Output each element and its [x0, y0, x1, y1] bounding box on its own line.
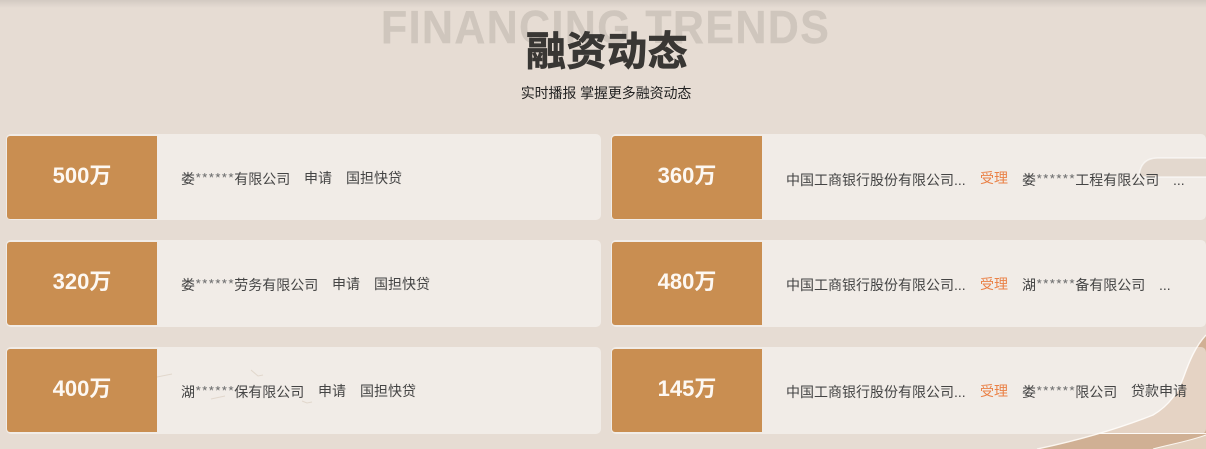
amount: 145万 — [658, 376, 716, 401]
panel: record 480万 — [611, 240, 1206, 327]
panel: record 145万: 娄******限公司 — [1022, 382, 1117, 402]
record text: 中国工商银行股份有限公司... — [786, 277, 966, 293]
title: 融资动态 — [526, 30, 688, 74]
panel: record 500万: 国担快贷 — [346, 170, 402, 186]
record text: 湖******保有限公司 — [181, 382, 304, 402]
panel: record 145万: 受理 — [980, 383, 1008, 399]
panel: record 400万 — [6, 347, 601, 434]
record text: 娄******劳务有限公司 — [181, 275, 318, 295]
panel: record 320万: 国担快贷 — [374, 276, 430, 292]
panel: record 145万: 贷款申请 — [1131, 383, 1187, 399]
amount — [612, 242, 762, 325]
amount: 480万 — [658, 269, 716, 294]
amount — [7, 136, 157, 219]
amount — [612, 136, 762, 219]
record text: 娄******有限公司 — [181, 169, 290, 189]
panel: record 500万 — [6, 134, 601, 220]
panel: record 360万: 娄******工程有限公司 — [1022, 170, 1159, 190]
panel: record 360万: 受理 — [980, 170, 1008, 186]
amount: 500万 — [53, 163, 111, 188]
background english title: FINANCING TRENDS — [381, 1, 830, 53]
panel: record 480万: 湖******备有限公司 — [1022, 275, 1145, 295]
record text: 中国工商银行股份有限公司... — [786, 172, 966, 188]
amount: 360万 — [658, 163, 716, 188]
record text: 中国工商银行股份有限公司... — [786, 384, 966, 400]
subtitle: 实时播报 掌握更多融资动态 — [521, 85, 691, 101]
amount: 320万 — [53, 269, 111, 294]
panel: record 360万: ... — [1173, 172, 1185, 188]
amount — [7, 242, 157, 325]
panel: record 360万 — [611, 134, 1206, 220]
panel: record 480万: ... — [1159, 277, 1171, 293]
panel: record 145万 — [611, 347, 1206, 434]
panel: record 320万 — [6, 240, 601, 327]
panel: record 500万: 申请 — [304, 170, 332, 186]
panel: record 400万: 国担快贷 — [360, 383, 416, 399]
panel: record 400万: 申请 — [318, 383, 346, 399]
panel: record 320万: 申请 — [332, 276, 360, 292]
amount — [7, 349, 157, 432]
amount: 400万 — [53, 376, 111, 401]
panel: record 480万: 受理 — [980, 276, 1008, 292]
amount — [612, 349, 762, 432]
